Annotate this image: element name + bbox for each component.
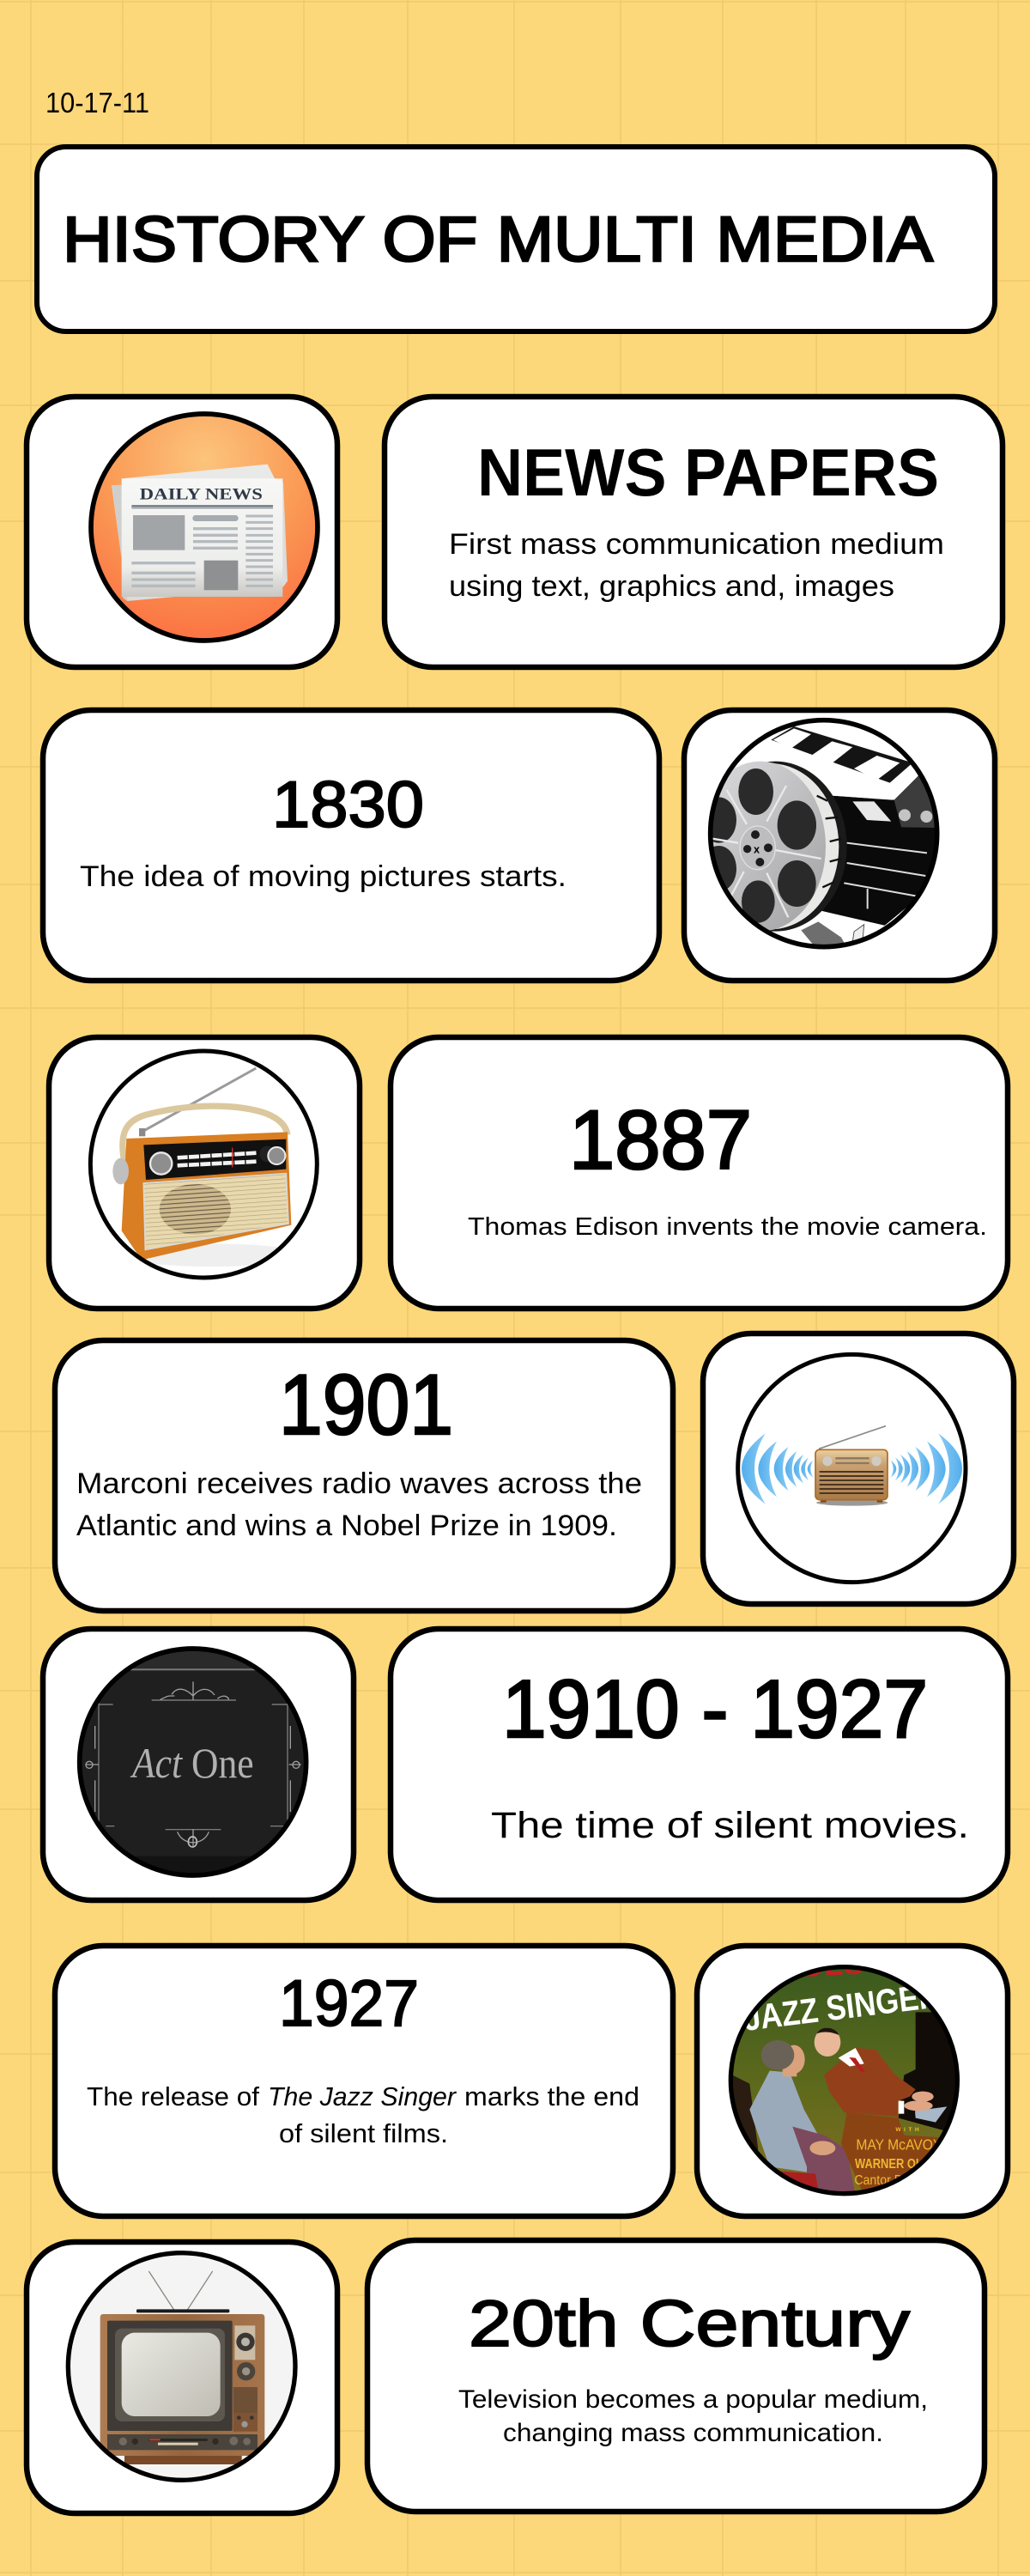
icon: The Jazz Singer poster: Cantor D xyxy=(854,2173,903,2188)
icon: newspaper: DAILY NEWS xyxy=(140,486,263,504)
body text: news papers: using text, graphics and, images xyxy=(449,570,894,603)
body text: 1927 xyxy=(87,2081,639,2148)
body text: 1887: Thomas Edison invents the movie camera. xyxy=(468,1213,987,1241)
body text: 20th century xyxy=(458,2385,928,2447)
panel: radio image card xyxy=(49,1037,360,1309)
icon: vintage radio xyxy=(90,1051,317,1278)
body text: 20th century: Television becomes a popular medium, xyxy=(458,2385,928,2414)
heading: 1927: 1927 xyxy=(279,1967,419,2040)
panel: radio waves image card xyxy=(703,1334,1014,1604)
icon: The Jazz Singer poster xyxy=(730,1942,961,2196)
icon: The Jazz Singer poster: JOLSON xyxy=(781,1942,912,1984)
heading: 1910 - 1927: 1910 - 1927 xyxy=(502,1663,928,1755)
heading: news papers: NEWS PAPERS xyxy=(477,434,939,510)
icon: film reel and clapperboard xyxy=(695,720,942,953)
body text: 1910-1927: The time of silent movies. xyxy=(491,1805,969,1846)
body text: 1927: The Jazz Singer xyxy=(268,2081,457,2111)
panel: film reel image card xyxy=(684,710,995,981)
body text: 1927: marks the end xyxy=(464,2081,639,2111)
panel: news papers text xyxy=(385,397,1003,667)
panel: silent film title image card xyxy=(43,1629,354,1900)
heading: 20th Century: 20th Century xyxy=(469,2287,910,2360)
panel: 1901 text xyxy=(55,1340,673,1611)
title panel xyxy=(37,147,995,331)
body text: news papers: First mass communication medium xyxy=(449,528,944,561)
icon: Act One title card: Act One xyxy=(130,1739,254,1787)
icon: vintage television xyxy=(68,2253,295,2480)
icon: Act One title card xyxy=(77,1646,309,1878)
icon: The Jazz Singer poster: WITH xyxy=(895,2127,919,2133)
heading: 1830: 1830 xyxy=(272,769,424,841)
body text: 1927: of silent films. xyxy=(279,2118,448,2148)
panel: newspaper image card xyxy=(27,397,337,667)
panel: television image card xyxy=(27,2242,337,2513)
panel: Jazz Singer image card xyxy=(697,1942,1008,2216)
panel: 1910-1927 text xyxy=(391,1629,1008,1900)
icon: radio with blue sound waves xyxy=(738,1354,966,1583)
heading: 1887: 1887 xyxy=(569,1093,752,1187)
body text: 1927: The release of xyxy=(87,2081,259,2111)
icon: The Jazz Singer poster: WARNER OLAND xyxy=(855,2157,947,2172)
title heading: HISTORY OF MULTI MEDIA xyxy=(63,204,934,275)
icon: The Jazz Singer poster: MAY McAVOY xyxy=(856,2136,942,2153)
body text: 1901: Atlantic and wins a Nobel Prize in 1909. xyxy=(76,1510,617,1542)
icon: newspaper xyxy=(91,414,318,641)
body text: 1901: Marconi receives radio waves across the xyxy=(76,1467,642,1500)
body text: 1830: The idea of moving pictures starts. xyxy=(80,860,566,893)
icon: film reel and clapperboard: x xyxy=(754,843,760,855)
icon: The Jazz Singer poster: JAZZ SINGER xyxy=(742,1975,942,2038)
body text: 20th century: changing mass communication. xyxy=(503,2419,883,2447)
body text: 1901 xyxy=(76,1467,642,1542)
date: 10-17-11 xyxy=(45,87,149,118)
panel: 1927 text xyxy=(55,1946,673,2216)
body text: news papers xyxy=(449,528,944,603)
panel: 1887 text xyxy=(391,1037,1008,1309)
heading: 1901: 1901 xyxy=(279,1357,453,1452)
panel: 20th century text xyxy=(367,2240,985,2512)
panel: 1830 text xyxy=(43,710,659,981)
